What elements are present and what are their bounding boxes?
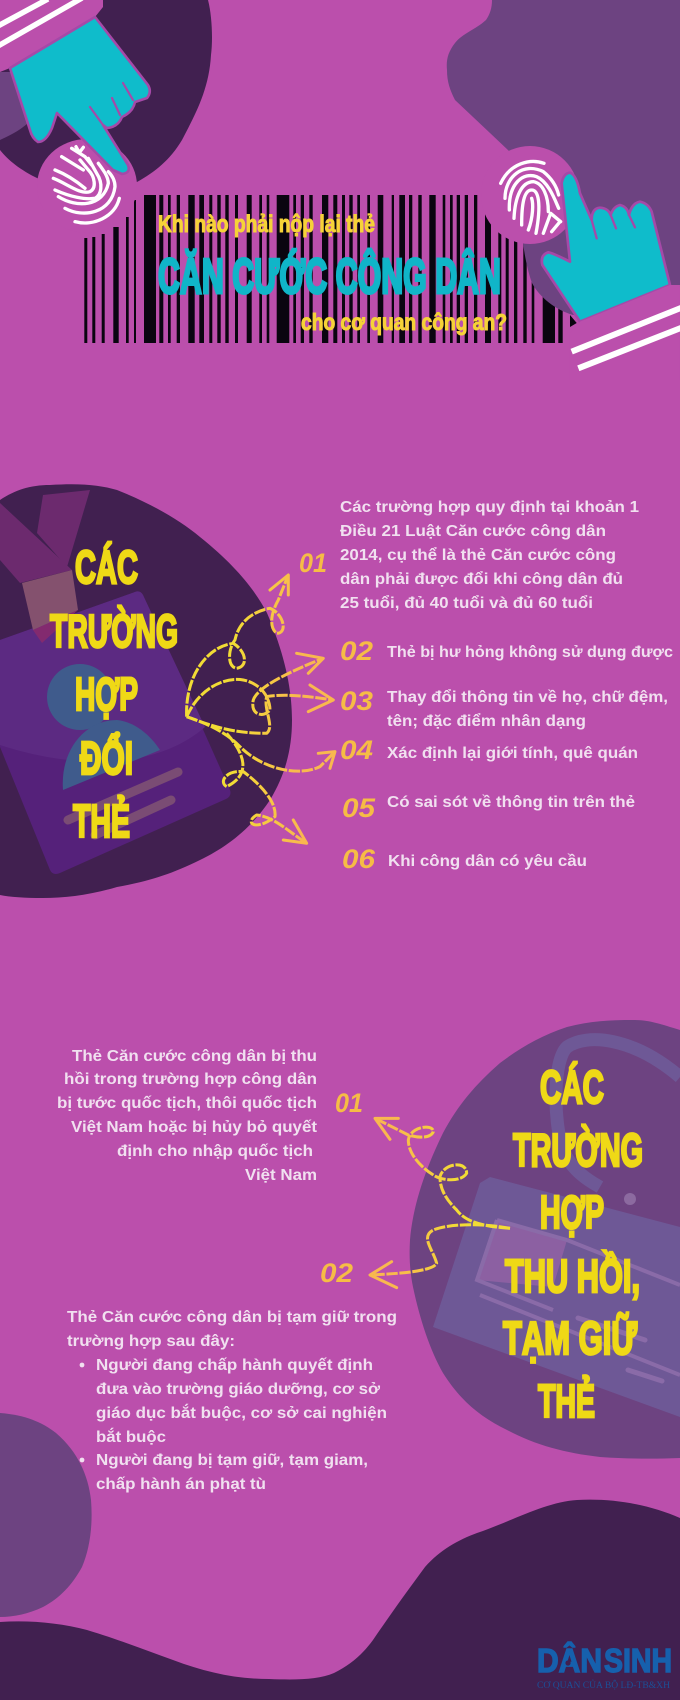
item 01 [299,499,639,612]
text block: temporary hold: bắt buộc [96,1427,166,1446]
hand: top right [542,173,680,380]
blob with card holder illustration [400,1015,680,1465]
title [158,211,507,335]
barcode [84,195,577,343]
item 04: 04 [340,735,373,765]
item 02: Thẻ bị hư hỏng không sử dụng được [387,644,673,661]
blob: top right [447,0,680,315]
item 01: 01 [299,548,327,578]
text block: temporary hold: đưa vào trường giáo dưỡng, cơ sở [96,1381,381,1398]
text block: temporary hold: Người đang chấp hành quyết định [96,1357,373,1374]
text block: revocation: hồi trong trường hợp công dân [64,1071,317,1088]
label 02: 02 [320,1258,353,1288]
logo: Dân Sinh: DÂN [537,1642,602,1679]
item 03 [340,686,668,730]
item 05: 05 [342,793,376,823]
blob: top left lighter edge [0,72,28,140]
text block: revocation [57,1048,318,1184]
title line 3: cho cơ quan công an? [301,309,507,335]
blob: top left [0,0,212,182]
item 03: tên; đặc điểm nhân dạng [387,712,586,730]
item 03: 03 [340,686,373,716]
heading: các trường hợp đổi thẻ: CÁC [75,541,138,593]
heading: các trường hợp thu hồi, tạm giữ thẻ: THẺ [538,1375,595,1427]
text block: revocation: Thẻ Căn cước công dân bị thu [72,1048,317,1065]
text block: temporary hold [67,1309,397,1493]
heading: các trường hợp thu hồi, tạm giữ thẻ [503,1061,643,1427]
blob: bottom wave [0,1500,680,1700]
item 03: Thay đổi thông tin về họ, chữ đệm, [387,688,668,706]
item 01: dân phải được đổi khi công dân đủ [340,570,623,588]
item 06: 06 [342,844,376,874]
panel: card change section [0,470,673,910]
text block: temporary hold: giáo dục bắt buộc, cơ sở cai nghiện [96,1403,387,1422]
heading: các trường hợp đổi thẻ: THẺ [73,795,130,847]
heading: các trường hợp đổi thẻ [50,541,178,847]
item 05: Có sai sót về thông tin trên thẻ [387,794,635,811]
heading: các trường hợp đổi thẻ: TRƯỜNG [50,605,178,657]
heading: các trường hợp đổi thẻ: ĐỔI [80,732,133,784]
text block: temporary hold: Thẻ Căn cước công dân bị tạm giữ trong [67,1309,397,1326]
item 04: Xác định lại giới tính, quê quán [387,745,638,762]
item 01: 2014, cụ thể là thẻ Căn cước công [340,546,616,564]
item 06: Khi công dân có yêu cầu [388,853,587,870]
title line 1: Khi nào phải nộp lại thẻ [158,211,375,238]
item 06 [342,844,587,874]
text block: revocation: định cho nhập quốc tịch [117,1143,313,1160]
text block: revocation: bị tước quốc tịch, thôi quốc tịch [57,1095,317,1112]
item 01: 25 tuổi, đủ 40 tuổi và đủ 60 tuổi [340,594,593,612]
text block: revocation: Việt Nam [245,1167,317,1184]
item 05 [342,793,635,823]
heading: các trường hợp đổi thẻ: HỢP [75,668,138,720]
arrows: six dashed arrows [187,575,335,843]
text block: temporary hold: Người đang bị tạm giữ, tạm giam, [96,1452,368,1469]
blob with ID card illustration [0,484,292,898]
blob: bottom left [0,1413,92,1617]
logo: Dân Sinh: CƠ QUAN CỦA BỘ LĐ-TB&XH [537,1680,671,1690]
text block: revocation: Việt Nam hoặc bị hủy bỏ quyết [71,1119,318,1136]
item 02: 02 [340,636,373,666]
text block: temporary hold: trường hợp sau đây: [67,1333,235,1350]
hand: top left [0,0,150,174]
fingerprint: top right [481,146,579,244]
item 04 [340,735,638,765]
heading: các trường hợp thu hồi, tạm giữ thẻ: CÁC [540,1061,604,1113]
item 01: Điều 21 Luật Căn cước công dân [340,523,606,540]
fingerprint: top left [37,139,137,233]
label 01: 01 [335,1088,363,1118]
text block: temporary hold: chấp hành án phạt tù [96,1476,266,1493]
item 01: Các trường hợp quy định tại khoản 1 [340,499,639,516]
heading: các trường hợp thu hồi, tạm giữ thẻ: HỢP [540,1186,604,1238]
arrows: two dashed arrows [370,1118,510,1288]
panel: revocation section [57,1015,680,1493]
item 02 [340,636,673,666]
logo: Dân Sinh [537,1642,672,1690]
